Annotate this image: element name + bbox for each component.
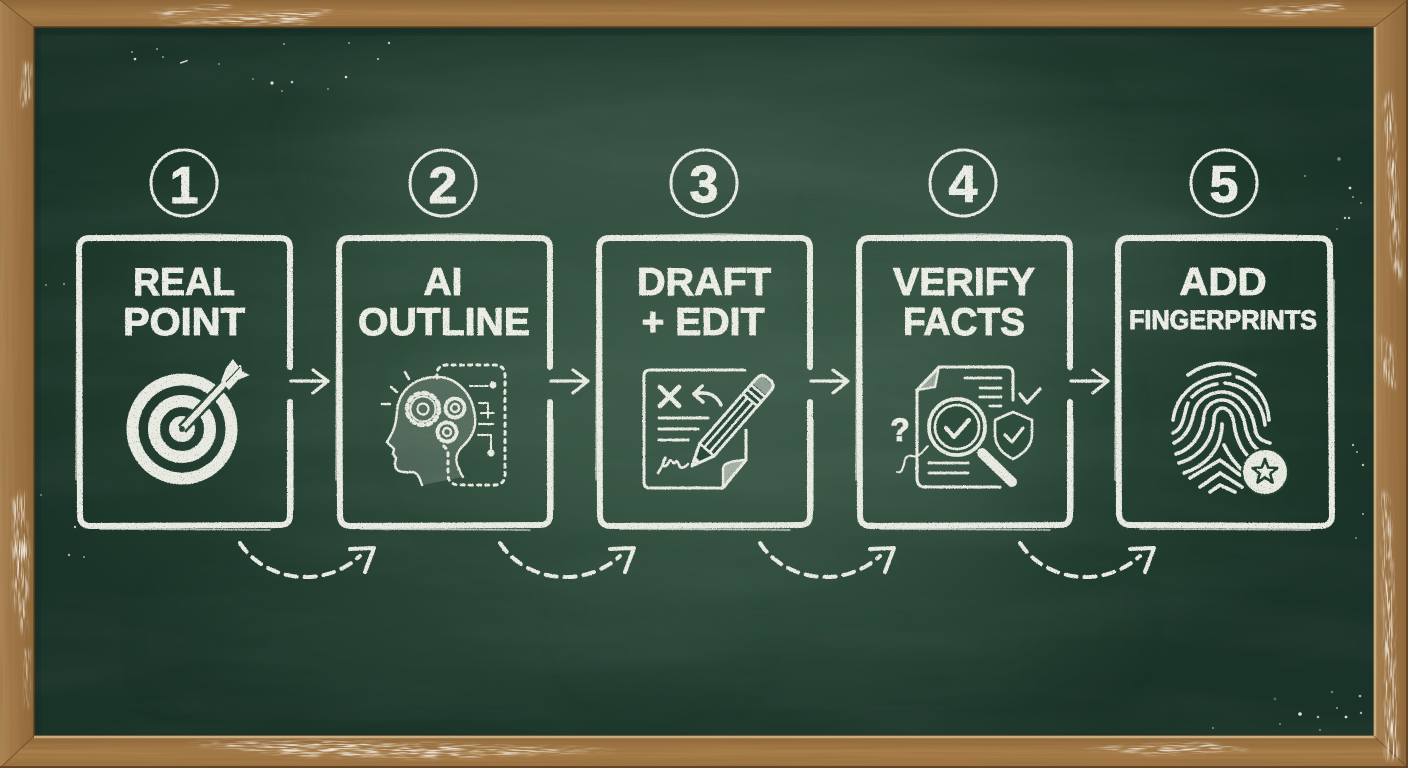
number badge 1: 1	[170, 157, 198, 215]
heading: draft + edit: DRAFT	[637, 261, 771, 304]
icon: head with gears and circuit	[382, 365, 505, 485]
heading: draft + edit: + EDIT	[642, 301, 765, 344]
heading: verify facts	[893, 261, 1035, 344]
heading: draft + edit	[637, 261, 771, 344]
heading: AI outline: OUTLINE	[358, 301, 530, 344]
number badge 2: 2	[429, 157, 457, 215]
heading: add fingerprints: FINGERPRINTS	[1129, 305, 1317, 335]
panel outline 2	[336, 234, 553, 530]
heading: AI outline	[358, 261, 530, 344]
number badge 5: 5	[1210, 156, 1238, 214]
number badge 4: 4	[949, 156, 978, 214]
dashed arrow: below step 1	[240, 543, 374, 577]
panel: step 5 add fingerprints	[1115, 234, 1334, 530]
number badge 3: 3	[690, 156, 718, 214]
heading: verify facts: VERIFY	[893, 261, 1035, 304]
number badge 4	[930, 150, 996, 216]
arrow: step 2 to 3	[551, 370, 588, 393]
dashed arrow: below step 2	[500, 543, 634, 577]
number badge 2	[410, 150, 476, 216]
number badge 1	[151, 150, 217, 216]
dashed arrow: below step 4	[1020, 543, 1154, 577]
panel: step 3 draft and edit	[596, 234, 813, 530]
heading: AI outline: AI	[424, 261, 462, 304]
number badge 5	[1191, 150, 1257, 216]
panel: step 1 real point	[76, 234, 293, 530]
heading: real point: POINT	[123, 301, 245, 344]
dashed arrow: below step 3	[760, 543, 894, 577]
panel: step 2 AI outline	[336, 234, 553, 530]
icon: document, magnifier and shield	[890, 367, 1040, 487]
heading: real point: REAL	[133, 261, 235, 304]
number badge 3	[671, 150, 737, 216]
panel: step 4 verify facts	[856, 234, 1073, 530]
icon: document and pencil	[644, 370, 776, 488]
panel outline 4	[856, 234, 1073, 530]
panel outline 1	[76, 234, 293, 530]
icon: fingerprint with star badge	[1173, 364, 1288, 495]
panel outline 3	[596, 234, 813, 530]
icon: target with arrow	[132, 359, 250, 478]
panel outline 5	[1115, 234, 1334, 530]
heading: add fingerprints	[1129, 261, 1317, 335]
heading: verify facts: FACTS	[903, 301, 1025, 344]
icon: document, magnifier and shield: ?	[890, 412, 910, 448]
arrow: step 4 to 5	[1071, 370, 1108, 393]
arrow: step 1 to 2	[291, 370, 328, 393]
heading: real point	[123, 261, 245, 344]
heading: add fingerprints: ADD	[1180, 261, 1266, 304]
arrow: step 3 to 4	[811, 370, 848, 393]
